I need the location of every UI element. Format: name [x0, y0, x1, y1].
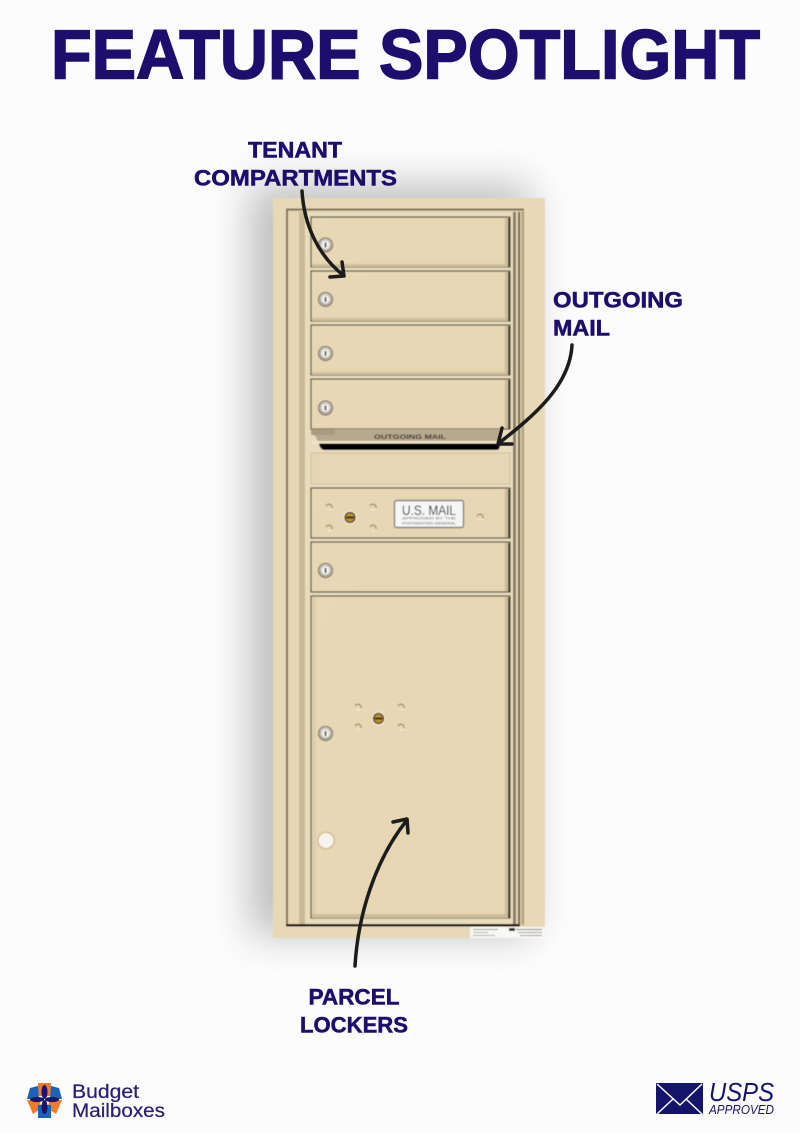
label: parcel lockers: PARCEL	[308, 984, 400, 1010]
tenant key hole plug	[317, 832, 335, 849]
U.S. Mail plate	[394, 500, 464, 528]
logo: Budget Mailboxes: Mailboxes	[72, 1100, 165, 1122]
icon: logo star	[27, 1083, 62, 1118]
logo: Budget Mailboxes	[27, 1081, 165, 1122]
label: outgoing mail: MAIL	[553, 316, 610, 340]
label: tenant compartments: TENANT	[248, 138, 342, 162]
label: tenant compartments: COMPARTMENTS	[194, 166, 397, 190]
outer frame	[273, 198, 545, 938]
tenant compartment door 3	[311, 325, 510, 375]
logo: Budget Mailboxes: Budget	[72, 1081, 140, 1103]
outgoing mail flap and slot	[311, 429, 509, 450]
mailbox unit illustration	[250, 185, 545, 938]
label: parcel lockers: LOCKERS	[300, 1012, 408, 1038]
U.S. Mail plate: U.S. MAIL	[402, 503, 456, 518]
U.S. Mail plate: APPROVED BY THE	[402, 516, 456, 520]
manufacturer label	[470, 927, 545, 938]
logo: USPS Approved	[656, 1077, 775, 1117]
U.S. Mail plate: POSTMASTER GENERAL	[402, 520, 457, 526]
tenant compartment door 2	[311, 271, 510, 321]
logo: USPS Approved: USPS	[709, 1077, 775, 1107]
mailbox shadow	[250, 185, 530, 935]
icon: envelope	[656, 1083, 703, 1114]
tenant compartment door 5	[311, 542, 510, 592]
blank panel	[311, 453, 510, 484]
label: outgoing mail: OUTGOING	[553, 288, 683, 312]
outgoing mail flap and slot: OUTGOING MAIL	[374, 434, 446, 441]
tenant compartment door 4	[311, 379, 510, 429]
parcel locker door	[311, 596, 510, 918]
title: FEATURE SPOTLIGHT	[51, 16, 760, 94]
arrow: outgoing mail	[498, 345, 572, 444]
arrow: tenant compartments	[302, 191, 344, 277]
tenant compartment door 1	[311, 217, 510, 267]
label: outgoing mail	[553, 288, 683, 340]
U.S. Mail access door	[311, 488, 510, 538]
label: tenant compartments	[194, 138, 397, 190]
label: parcel lockers	[300, 984, 408, 1038]
logo: USPS Approved: APPROVED	[708, 1102, 774, 1117]
icon: brass lock	[343, 510, 357, 524]
arrow: parcel lockers	[355, 819, 408, 966]
